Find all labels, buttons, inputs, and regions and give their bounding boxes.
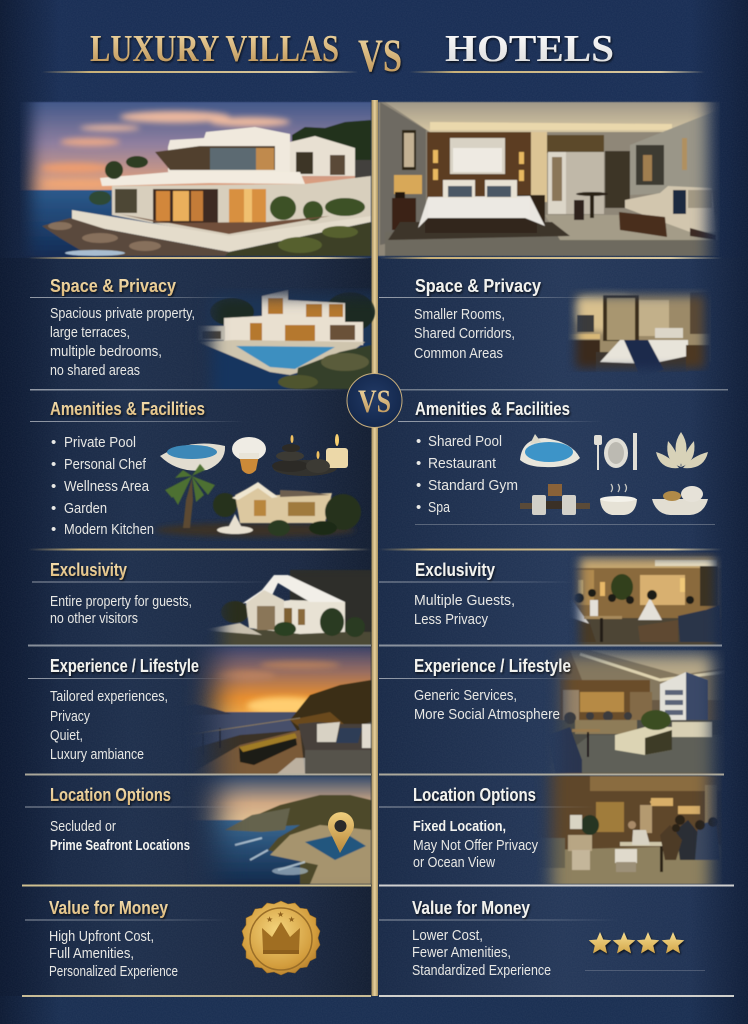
text: hotel space: Common Areas	[414, 345, 503, 362]
list: villa amenities: Wellness Area	[64, 478, 150, 495]
list: villa amenities: •	[51, 478, 56, 495]
text: hotel exclusivity: Less Privacy	[414, 611, 488, 628]
list: hotel amenities: Standard Gym	[428, 477, 518, 494]
text: villa space: multiple bedrooms,	[50, 343, 162, 360]
text: hotel value: Fewer Amenities,	[412, 944, 511, 961]
text: villa experience: Luxury ambiance	[50, 746, 144, 763]
list: villa amenities: •	[51, 500, 56, 517]
panel: exclusivity, hotel	[379, 552, 722, 646]
image: hotel dining room	[530, 776, 722, 884]
icon: gold medal with crown: ★	[277, 910, 284, 919]
panel: exclusivity, villa	[32, 560, 371, 645]
text: hotel space	[414, 306, 515, 362]
icon: cutlery	[594, 433, 637, 470]
image: white house	[195, 570, 371, 645]
list: hotel amenities: Restaurant	[428, 455, 497, 472]
text: villa experience: Privacy	[50, 708, 90, 725]
panel: amenities, hotel	[398, 399, 715, 525]
list: villa amenities: •	[51, 456, 56, 473]
heading: amenities & facilities: Amenities & Facilities	[50, 399, 205, 419]
icon: dumbbell	[520, 484, 590, 515]
text: villa exclusivity: no other visitors	[50, 610, 138, 627]
title: hotels: HOTELS	[445, 28, 614, 70]
heading: value for money: Value for Money	[49, 898, 168, 918]
list: villa amenities: Garden	[64, 500, 107, 517]
icon: chef hat	[232, 437, 266, 474]
icon: gold medal with crown: ★	[266, 915, 273, 924]
panel: space & privacy, villa	[30, 276, 375, 389]
icon: soup bowl	[600, 484, 637, 515]
text: villa location: Secluded or	[50, 818, 116, 835]
heading: value for money: Value for Money	[412, 898, 530, 918]
icon: gold medal with crown: ★	[288, 915, 295, 924]
panel: experience, hotel	[379, 650, 725, 774]
icon: lotus	[656, 432, 708, 468]
list: hotel amenities: Shared Pool	[428, 433, 502, 450]
text: villa space: Spacious private property,	[50, 305, 195, 322]
list: hotel amenities: •	[416, 477, 421, 494]
image: hotel lounge and building	[553, 650, 724, 774]
panel: space & privacy, hotel	[379, 276, 711, 376]
list: villa amenities: •	[51, 521, 56, 538]
icon: food bowl	[652, 486, 708, 515]
vs badge	[347, 374, 402, 428]
heading: experience / lifestyle: Experience / Lifestyle	[414, 656, 571, 676]
heading: exclusivity: Exclusivity	[50, 560, 127, 580]
icon: four stars	[589, 932, 684, 953]
icon: pool tub	[160, 444, 225, 471]
list: villa amenities	[51, 434, 154, 538]
text: villa experience: Quiet,	[50, 727, 83, 744]
panel: value, hotel	[379, 898, 705, 979]
text: hotel location: or Ocean View	[413, 854, 495, 871]
icon: spa stones and candles	[272, 434, 348, 476]
list: hotel amenities: Spa	[428, 499, 451, 516]
vs badge: VS	[358, 384, 391, 420]
heading: amenities & facilities: Amenities & Facilities	[415, 399, 570, 419]
text: hotel value: Lower Cost,	[412, 927, 483, 944]
text: villa exclusivity	[50, 593, 192, 627]
text: hotel exclusivity	[414, 592, 515, 628]
photo: seaside villa at sunset	[20, 102, 371, 256]
text: villa experience: Tailored experiences,	[50, 688, 168, 705]
title: luxury villas: LUXURY VILLAS	[90, 28, 339, 70]
text: hotel experience: Generic Services,	[414, 687, 517, 704]
list: hotel amenities: •	[416, 433, 421, 450]
text: villa value: Full Amenities,	[49, 945, 134, 962]
text: hotel location: May Not Offer Privacy	[413, 837, 538, 854]
text: villa experience	[50, 688, 168, 763]
title: vs: VS	[358, 30, 402, 82]
text: hotel space: Smaller Rooms,	[414, 306, 505, 323]
text: villa space	[50, 305, 195, 379]
text: villa value	[49, 928, 178, 980]
image: hotel bedroom	[566, 288, 711, 376]
list: hotel amenities: •	[416, 455, 421, 472]
image: villa with pool at night	[185, 288, 375, 389]
text: hotel value: Standardized Experience	[412, 962, 551, 979]
image: coastal cliff with pin	[180, 776, 371, 884]
text: hotel experience	[414, 687, 560, 723]
text: villa space: large terraces,	[50, 324, 130, 341]
panel: location, villa	[25, 776, 371, 884]
text: villa location: Prime Seafront Locations	[50, 837, 190, 854]
icon: gold medal with crown	[242, 901, 320, 975]
list: villa amenities: Modern Kitchen	[64, 521, 154, 538]
text: hotel location	[413, 818, 538, 871]
panel: value, villa	[25, 898, 320, 980]
photo: hotel room	[378, 102, 720, 256]
text: villa value: High Upfront Cost,	[49, 928, 154, 945]
list: villa amenities: Personal Chef	[64, 456, 147, 473]
text: villa value: Personalized Experience	[49, 963, 178, 980]
heading: space & privacy: Space & Privacy	[50, 276, 176, 296]
heading: experience / lifestyle: Experience / Lifestyle	[50, 656, 199, 676]
heading: location options: Location Options	[50, 785, 171, 805]
list: hotel amenities: •	[416, 499, 421, 516]
list: villa amenities: •	[51, 434, 56, 451]
text: hotel location: Fixed Location,	[413, 818, 506, 835]
panel: location, hotel	[379, 776, 722, 884]
list: hotel amenities	[416, 433, 518, 516]
text: hotel value	[412, 927, 551, 979]
icon: pool	[520, 434, 580, 467]
heading: space & privacy: Space & Privacy	[415, 276, 541, 296]
image: hotel lobby with guests	[572, 552, 722, 646]
image: sunset terrace	[172, 647, 371, 774]
list: villa amenities: Private Pool	[64, 434, 136, 451]
icon: location pin	[328, 812, 354, 853]
text: villa exclusivity: Entire property for guests,	[50, 593, 192, 610]
text: hotel exclusivity: Multiple Guests,	[414, 592, 515, 609]
text: hotel experience: More Social Atmosphere	[414, 706, 560, 723]
title	[90, 28, 614, 82]
heading: location options: Location Options	[413, 785, 536, 805]
panel: experience, villa	[28, 647, 371, 774]
text: villa location	[50, 818, 190, 854]
image: villa garden	[155, 464, 361, 537]
heading: exclusivity: Exclusivity	[415, 560, 495, 580]
text: hotel space: Shared Corridors,	[414, 325, 515, 342]
centre divider	[372, 100, 378, 996]
panel: amenities, villa	[30, 399, 361, 538]
text: villa space: no shared areas	[50, 362, 140, 379]
